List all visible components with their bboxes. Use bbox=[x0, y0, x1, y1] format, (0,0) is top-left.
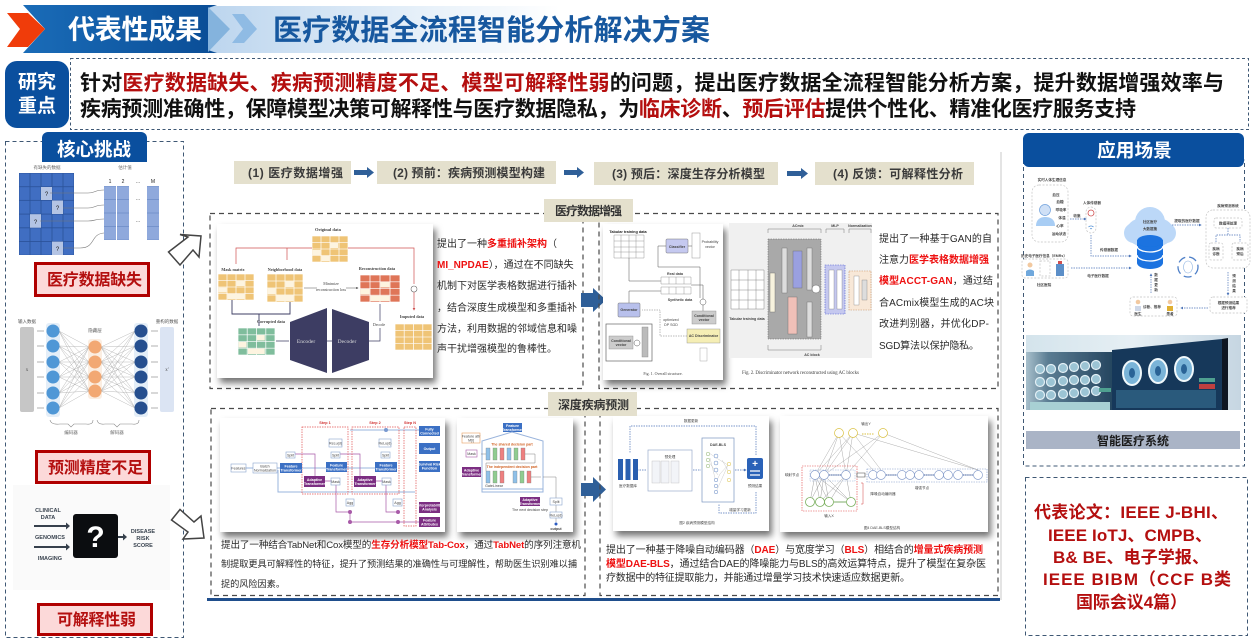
figure: ACCT-GAN overall structure: Conditional bbox=[611, 339, 631, 343]
chart: missing data matrix: ? bbox=[45, 192, 49, 198]
text: ACCT-GAN description: 改进判别器，并优化DP- bbox=[879, 317, 989, 330]
figure: DAE-BLS pipeline: 预测结果 bbox=[748, 483, 763, 488]
icon: red chevron bbox=[7, 13, 45, 47]
figure: Tab-Cox architecture: Feature bbox=[423, 518, 436, 522]
text: ACCT-GAN description: 合ACmix模型生成的AC块 bbox=[879, 296, 994, 309]
step 3: (3) 预后：深度生存分析模型 bbox=[612, 166, 765, 181]
diagram: community medical big data: 根据预测结果 bbox=[1218, 300, 1240, 305]
step 4: (4) 反馈：可解释性分析 bbox=[833, 166, 963, 181]
chart: autoencoder network: 隐藏层 bbox=[88, 327, 102, 334]
figure: MI_NPDAE architecture: Encoder bbox=[297, 339, 315, 345]
step 4 bbox=[815, 162, 974, 185]
diagram: community medical big data: 呼吸率 bbox=[1056, 207, 1067, 212]
figure: ACCT-GAN overall structure: AC Discriminator bbox=[689, 334, 719, 338]
figure: Tab-Cox architecture: Agg bbox=[347, 501, 353, 505]
diagram: community medical big data: 数 bbox=[1154, 272, 1158, 277]
figure: Tab-Cox architecture: Step 2 bbox=[369, 421, 381, 425]
diagram: community medical big data: 疾病 bbox=[1212, 246, 1220, 251]
figure: ACCT-GAN overall structure: vector bbox=[616, 343, 627, 347]
figure: Tab-Cox architecture: Mask bbox=[331, 480, 340, 484]
diagram: community medical big data: 疾病预测系统 bbox=[1217, 203, 1239, 208]
figure: feature transformer detail: Feature attr bbox=[462, 434, 481, 438]
figure: MI_NPDAE architecture: Minimize bbox=[323, 281, 339, 286]
diagram: community medical big data: 社区医疗 bbox=[1143, 219, 1158, 224]
figure: Tab-Cox architecture: Function bbox=[422, 466, 437, 470]
diagram: community medical big data: 患者 bbox=[1166, 311, 1174, 316]
figure: ACCT-GAN overall structure: Probability bbox=[702, 240, 719, 244]
arrow: hollow down right bbox=[172, 510, 204, 539]
figure: Tab-Cox architecture: Batch bbox=[260, 464, 270, 468]
figure: feature transformer detail: Split bbox=[552, 500, 560, 504]
chart: missing data matrix: 有缺失的数据 bbox=[34, 164, 61, 171]
figure: AC block discriminator: Normalization bbox=[848, 224, 872, 228]
label: weak interpretability bbox=[38, 604, 152, 634]
figure: DAE-BLS pipeline bbox=[613, 416, 769, 531]
figure: ACCT-GAN overall structure: Synthetic data bbox=[668, 298, 693, 302]
figure: feature transformer detail: Feature bbox=[506, 424, 519, 428]
figure: Tab-Cox architecture: Adaptive bbox=[357, 478, 373, 482]
figure: MI_NPDAE architecture: reconstruction loss bbox=[316, 287, 346, 292]
figure: Tab-Cox architecture: ReLu(d) bbox=[329, 442, 342, 446]
diagram: community medical big data: 大数据集 bbox=[1143, 226, 1158, 231]
research focus statement: 针对医疗数据缺失、疾病预测精度不足、模型可解释性弱的问题，提出医疗数据全流程智能分析方案，提升数据增强效率与 bbox=[80, 71, 1224, 95]
section label: disease prediction bbox=[548, 392, 637, 416]
figure: Tab-Cox architecture: Transformer bbox=[304, 482, 326, 486]
diagram: community medical big data: 果 bbox=[1232, 288, 1236, 293]
chart: missing data matrix: … bbox=[136, 218, 140, 224]
pipeline steps bbox=[234, 161, 974, 185]
diagram: community medical big data: 社区医院 bbox=[1037, 282, 1052, 287]
text: Tab-Cox description bbox=[221, 539, 581, 589]
figure: feature transformer detail: The shared decision part bbox=[491, 442, 534, 446]
figure: MI_NPDAE architecture: Decoder bbox=[338, 339, 356, 345]
figure: MI_NPDAE architecture: Imputed data bbox=[400, 314, 425, 319]
figure: AC block discriminator: AC block bbox=[804, 353, 820, 357]
diagram: community medical big data: 更 bbox=[1154, 282, 1158, 287]
step 1 bbox=[234, 161, 351, 184]
figure: DAE-BLS pipeline: DAE-BLS bbox=[710, 443, 727, 447]
text: MI_NPDAE description: 声干扰增强模型的鲁棒性。 bbox=[437, 342, 557, 355]
figure: DAE-BLS structure: 图4 DAE-BLS模型结构 bbox=[864, 525, 901, 530]
figure: ACCT-GAN overall structure: Tabular training data bbox=[609, 230, 648, 234]
figure: feature transformer detail: ReLu(d) bbox=[550, 514, 562, 518]
chart: autoencoder network bbox=[18, 318, 179, 436]
title: main heading: 医疗数据全流程智能分析解决方案 bbox=[273, 14, 710, 47]
figure: Tab-Cox architecture: Transformer bbox=[376, 468, 397, 472]
figure: feature transformer detail: Transformer bbox=[502, 428, 524, 432]
figure: feature transformer detail: Transformer bbox=[520, 502, 541, 506]
text: MI_NPDAE description: 机制下对医学表格数据进行插补 bbox=[437, 279, 577, 292]
arrow: disease prediction flow bbox=[581, 477, 606, 502]
arrow: step 3 to 4 bbox=[787, 168, 808, 179]
chart: autoencoder network: x bbox=[26, 368, 29, 373]
research focus statement: 疾病预测准确性，保障模型决策可解释性与医疗数据隐私，为临床诊断、预后评估提供个性化、精准化医疗服务支持 bbox=[80, 97, 1136, 121]
diagram: community medical big data: 数据预处理 bbox=[1219, 220, 1237, 226]
figure: DAE-BLS structure bbox=[780, 416, 988, 532]
chart: autoencoder network: 重构的数据 bbox=[156, 318, 179, 325]
heading: application scenarios: 应用场景 bbox=[1097, 140, 1172, 161]
section label: data augmentation: 医疗数据增强 bbox=[555, 203, 622, 218]
figure: Tab-Cox architecture bbox=[220, 418, 445, 532]
figure: Tab-Cox architecture: Fully bbox=[425, 428, 434, 432]
panel: disease prediction left bbox=[211, 408, 585, 596]
figure: Tab-Cox architecture: Step N bbox=[404, 421, 416, 425]
figure: AC block discriminator: MLP bbox=[831, 224, 839, 228]
figure: DAE-BLS pipeline: 医疗数据库 bbox=[619, 483, 637, 488]
figure: Tab-Cox architecture: Agg bbox=[394, 501, 401, 505]
panel: representative papers: B& BE、电子学报、 bbox=[1053, 547, 1209, 567]
figure: ACCT-GAN overall structure: Generator bbox=[620, 308, 638, 312]
diagram: community medical big data: 诊断、推荐 bbox=[1143, 304, 1161, 309]
label: prediction accuracy bbox=[36, 452, 150, 482]
figure: Tab-Cox architecture: Features bbox=[231, 466, 246, 470]
figure: ACCT-GAN overall structure bbox=[603, 224, 723, 380]
diagram: community medical big data: 电子医疗数据 bbox=[1087, 273, 1109, 278]
step 2: (2) 预前：疾病预测模型构建 bbox=[393, 165, 545, 180]
chart: autoencoder network: 编码器 bbox=[64, 429, 78, 436]
step 2 bbox=[377, 161, 556, 184]
figure: Tab-Cox architecture: Split bbox=[287, 454, 294, 458]
figure: feature transformer detail: The next decision step bbox=[512, 508, 548, 512]
image: medical imaging monitors bbox=[1026, 335, 1241, 410]
panel: core challenges bbox=[6, 132, 184, 638]
figure: Tab-Cox architecture: Normalization bbox=[254, 468, 276, 472]
text: Tab-Cox description: 捉的风险因素。 bbox=[221, 578, 285, 589]
research focus badge bbox=[5, 61, 69, 128]
figure: Tab-Cox architecture: Transformer bbox=[355, 482, 376, 486]
figure: MI_NPDAE architecture: Mask matrix bbox=[221, 267, 245, 272]
chart: missing data matrix: M bbox=[151, 179, 155, 185]
chart: black box model: GENOMICS bbox=[35, 535, 65, 541]
header banner bbox=[7, 5, 560, 53]
panel: disease prediction right bbox=[600, 408, 998, 596]
figure: feature transformer detail: GateLinear bbox=[485, 484, 504, 488]
figure: feature transformer detail: Adaptive bbox=[522, 498, 538, 502]
label: missing data: 医疗数据缺失 bbox=[47, 270, 142, 289]
figure: DAE-BLS structure: 降噪自动编码器 bbox=[870, 491, 896, 496]
figure: feature transformer detail: output bbox=[550, 527, 562, 531]
diagram: community medical big data: 运动状态 bbox=[1052, 231, 1067, 236]
figure: ACCT-GAN overall structure: vector bbox=[705, 245, 716, 249]
chart: missing data matrix: 1 bbox=[109, 179, 112, 185]
chart: missing data matrix: 2 bbox=[122, 179, 125, 185]
text: Tab-Cox description: 制提取更具可解释性的特征，提升了预测结果的准确性与可理解性，帮助医生识别难以捕 bbox=[221, 558, 577, 569]
panel: data augmentation right bbox=[599, 214, 998, 388]
diagram: community medical big data: 测 bbox=[1232, 278, 1236, 283]
diagram: community medical big data: 心率 bbox=[1056, 223, 1064, 228]
diagram: community medical big data bbox=[1021, 177, 1250, 316]
heading: core challenges bbox=[42, 132, 147, 162]
chart: black box model: ? bbox=[86, 521, 105, 554]
figure: DAE-BLS structure: 增强节点 bbox=[915, 485, 930, 490]
text: MI_NPDAE description: MI_NPDAE），通过在不同缺失 bbox=[437, 258, 574, 271]
figure: AC block discriminator: ACmix bbox=[792, 224, 804, 228]
panel: representative papers: IEEE BIBM（CCF B类 bbox=[1043, 570, 1231, 589]
label: prediction accuracy: 预测精度不足 bbox=[48, 458, 143, 477]
chart: black box model bbox=[13, 485, 170, 590]
panel: representative papers: 国际会议4篇） bbox=[1076, 592, 1187, 612]
figure: Tab-Cox architecture: Adaptive bbox=[307, 478, 322, 482]
research focus badge: 研究 bbox=[18, 70, 56, 93]
panel: representative papers: IEEE IoTJ、CMPB、 bbox=[1048, 526, 1212, 545]
diagram: community medical big data: 体温 bbox=[1058, 215, 1066, 220]
figure: feature transformer detail: Transformer bbox=[461, 472, 483, 476]
diagram: community medical big data: 血糖 bbox=[1056, 199, 1064, 204]
figure: Tab-Cox architecture: Survival Risk bbox=[418, 462, 441, 466]
label: missing data bbox=[36, 264, 148, 296]
figure: DAE-BLS pipeline: 增量学习更新 bbox=[729, 507, 751, 512]
text: MI_NPDAE description: 提出了一种多重插补架构（ bbox=[437, 237, 557, 250]
chart: black box model: DISEASE bbox=[131, 529, 155, 535]
text: ACCT-GAN description: 注意力医学表格数据增强 bbox=[879, 253, 989, 266]
figure: DAE-BLS pipeline: + bbox=[752, 459, 758, 470]
diagram: community medical big data: 进行推荐 bbox=[1221, 305, 1236, 310]
diagram: community medical big data: 诊断 bbox=[1212, 251, 1220, 256]
text: MI_NPDAE description: 方法，利用数据的邻域信息和噪 bbox=[437, 322, 577, 335]
chart: autoencoder network: 解码器 bbox=[110, 429, 124, 436]
figure: feature transformer detail bbox=[457, 418, 573, 532]
diagram: community medical big data: 新 bbox=[1154, 287, 1158, 292]
arrow: hollow up right bbox=[168, 234, 201, 265]
chart: black box model: CLINICAL bbox=[35, 508, 61, 514]
diagram: community medical big data: 疾病 bbox=[1236, 246, 1244, 251]
text: MI_NPDAE description: ，结合深度生成模型和多重插补 bbox=[437, 301, 577, 314]
figure: feature transformer detail: Mask bbox=[467, 452, 476, 456]
text: ACCT-GAN description: 提出了一种基于GAN的自 bbox=[879, 232, 992, 245]
caption: intelligent medical system bbox=[1026, 431, 1240, 449]
heading: application scenarios bbox=[1023, 133, 1244, 167]
figure: Tab-Cox architecture: Output bbox=[424, 447, 436, 451]
label: weak interpretability: 可解释性弱 bbox=[57, 610, 136, 629]
chart: missing data matrix bbox=[19, 164, 159, 255]
diagram: community medical big data: 历史电子医疗信息（EMRs） bbox=[1021, 253, 1067, 258]
figure: ACCT-GAN overall structure: vector bbox=[699, 318, 710, 322]
panel: representative papers bbox=[1026, 478, 1248, 636]
chart: black box model: SCORE bbox=[133, 543, 153, 549]
figure: DAE-BLS pipeline: 图2 疾病预测模型结构 bbox=[679, 520, 715, 525]
chart: missing data matrix: 估计值 bbox=[118, 164, 132, 171]
diagram: community medical big data: 结 bbox=[1232, 283, 1236, 288]
figure: feature transformer detail: Adaptive bbox=[464, 468, 479, 472]
caption: figure 2: Fig. 2. Discriminator network reconstructed using AC blocks bbox=[742, 371, 859, 376]
chart: missing data matrix: ? bbox=[56, 247, 60, 253]
figure: MI_NPDAE architecture: Decode bbox=[373, 322, 385, 327]
chart: black box model: RISK bbox=[136, 536, 150, 542]
figure: MI_NPDAE architecture: Original data bbox=[315, 227, 342, 232]
figure: Tab-Cox architecture: Feature bbox=[330, 464, 343, 468]
figure: Tab-Cox architecture: Connected bbox=[420, 432, 439, 436]
chart: autoencoder network: 输入数据 bbox=[18, 318, 36, 325]
chart: missing data matrix: … bbox=[136, 196, 140, 202]
chart: missing data matrix: … bbox=[136, 179, 140, 185]
chart: missing data matrix: ? bbox=[56, 206, 60, 212]
title: section tag: 代表性成果 bbox=[68, 15, 202, 45]
diagram: community medical big data: 血压 bbox=[1052, 192, 1060, 197]
diagram: community medical big data: 传感器数据 bbox=[1100, 247, 1118, 252]
diagram: community medical big data: 预后 bbox=[1236, 251, 1244, 256]
arrow: step 1 to 2 bbox=[354, 167, 374, 178]
panel: representative papers: 代表论文：IEEE J-BHI、 bbox=[1034, 502, 1228, 522]
figure: DAE-BLS structure: 输入X bbox=[824, 513, 834, 518]
diagram: community medical big data: 提取的医疗数据 bbox=[1174, 218, 1200, 223]
figure: DAE-BLS pipeline: 预处理 bbox=[665, 454, 676, 459]
figure: ACCT-GAN overall structure: Fig. 1. Overall structure. bbox=[643, 371, 683, 376]
figure: AC block discriminator: Tabular training data bbox=[729, 317, 766, 321]
figure: MI_NPDAE architecture bbox=[217, 224, 433, 378]
figure: ACCT-GAN overall structure: optimized bbox=[663, 318, 679, 322]
diagram: community medical big data: 收集 bbox=[1073, 213, 1081, 218]
figure: ACCT-GAN overall structure: Conditional bbox=[694, 314, 714, 318]
diagram: community medical big data: 人体传感器 bbox=[1083, 200, 1101, 205]
section label: disease prediction: 深度疾病预测 bbox=[558, 397, 629, 412]
figure: Tab-Cox architecture: ReLu(d) bbox=[379, 442, 391, 446]
text: ACCT-GAN description: SGD算法以保护隐私。 bbox=[879, 339, 979, 352]
figure: DAE-BLS structure: 输出Y bbox=[861, 421, 871, 426]
figure: Tab-Cox architecture: Attributes bbox=[421, 522, 438, 526]
panel: application scenarios bbox=[1021, 133, 1250, 466]
section label: data augmentation bbox=[544, 199, 633, 222]
step 1: (1) 医疗数据增强 bbox=[248, 165, 343, 180]
figure: ACCT-GAN overall structure: Real data bbox=[667, 272, 684, 276]
figure: Tab-Cox architecture: Split bbox=[332, 454, 339, 458]
diagram: community medical big data: 医生 bbox=[1134, 311, 1142, 316]
figure: MI_NPDAE architecture: Neighborhood data bbox=[268, 267, 303, 272]
figure: ACCT-GAN overall structure: Classifier bbox=[669, 245, 686, 249]
diagram: community medical big data: 实时人体生理信息 bbox=[1038, 177, 1067, 182]
figure: Tab-Cox architecture: Feature bbox=[380, 464, 392, 468]
chart: black box model: IMAGING bbox=[38, 556, 62, 562]
figure: Tab-Cox architecture: Step 1 bbox=[319, 421, 331, 425]
arrow: data augmentation flow bbox=[581, 288, 606, 312]
panel: data augmentation left bbox=[210, 214, 583, 388]
figure: Tab-Cox architecture: Transformer bbox=[326, 468, 348, 472]
figure: Tab-Cox architecture: Split bbox=[382, 454, 389, 458]
heading: core challenges: 核心挑战 bbox=[57, 139, 131, 160]
text: DAE-BLS description bbox=[606, 543, 986, 584]
step 3 bbox=[594, 162, 778, 185]
figure: AC block discriminator bbox=[729, 223, 872, 358]
arrow: step 2 to 3 bbox=[564, 167, 584, 178]
research focus badge: 重点 bbox=[18, 95, 56, 117]
figure: DAE-BLS structure: 映射节点 bbox=[785, 472, 800, 477]
research focus statement bbox=[70, 58, 1248, 130]
figure: Tab-Cox architecture: Feature bbox=[285, 464, 297, 468]
text: DAE-BLS description: 疗数据中的特征提取能力，并能通过增量学习技术快速适应数据更新。 bbox=[606, 571, 910, 584]
chart: black box model: DATA bbox=[41, 515, 55, 521]
figure: MI_NPDAE architecture: Corrupted data bbox=[257, 319, 286, 324]
figure: Tab-Cox architecture: Transformer bbox=[281, 468, 302, 472]
text: ACCT-GAN description bbox=[879, 232, 994, 352]
figure: Tab-Cox architecture: Analysis bbox=[422, 508, 437, 512]
caption: intelligent medical system: 智能医疗系统 bbox=[1097, 433, 1169, 448]
figure: DAE-BLS pipeline: 数据更新 bbox=[684, 418, 699, 423]
figure: MI_NPDAE architecture: Reconstruction data bbox=[359, 266, 396, 271]
text: ACCT-GAN description: 模型ACCT-GAN，通过结 bbox=[879, 274, 993, 287]
diagram: community medical big data: 预 bbox=[1232, 273, 1236, 278]
figure: Tab-Cox architecture: Interpretability bbox=[417, 504, 442, 508]
figure: feature transformer detail: M[i] bbox=[468, 438, 474, 442]
figure: ACCT-GAN overall structure: DP SGD bbox=[664, 323, 678, 327]
text: DAE-BLS description: 模型DAE-BLS，通过结合DAE的降噪能力与BLS的高效运算特点，提升了模型在复杂医 bbox=[606, 557, 986, 570]
text: MI_NPDAE description bbox=[437, 237, 577, 355]
chart: missing data matrix: ? bbox=[34, 220, 38, 226]
text: Tab-Cox description: 提出了一种结合TabNet和Cox模型的生存分析模型Tab-Cox，通过TabNet的序列注意机 bbox=[221, 539, 581, 551]
figure: Tab-Cox architecture: Mask bbox=[382, 480, 391, 484]
diagram: community medical big data: 据 bbox=[1154, 277, 1158, 282]
text: DAE-BLS description: 提出了一种基于降噪自动编码器（DAE）与宽度学习（BLS）相结合的增量式疾病预测 bbox=[606, 543, 983, 556]
figure: feature transformer detail: The independent decision part bbox=[487, 465, 538, 469]
chart: autoencoder network: x' bbox=[165, 368, 169, 373]
